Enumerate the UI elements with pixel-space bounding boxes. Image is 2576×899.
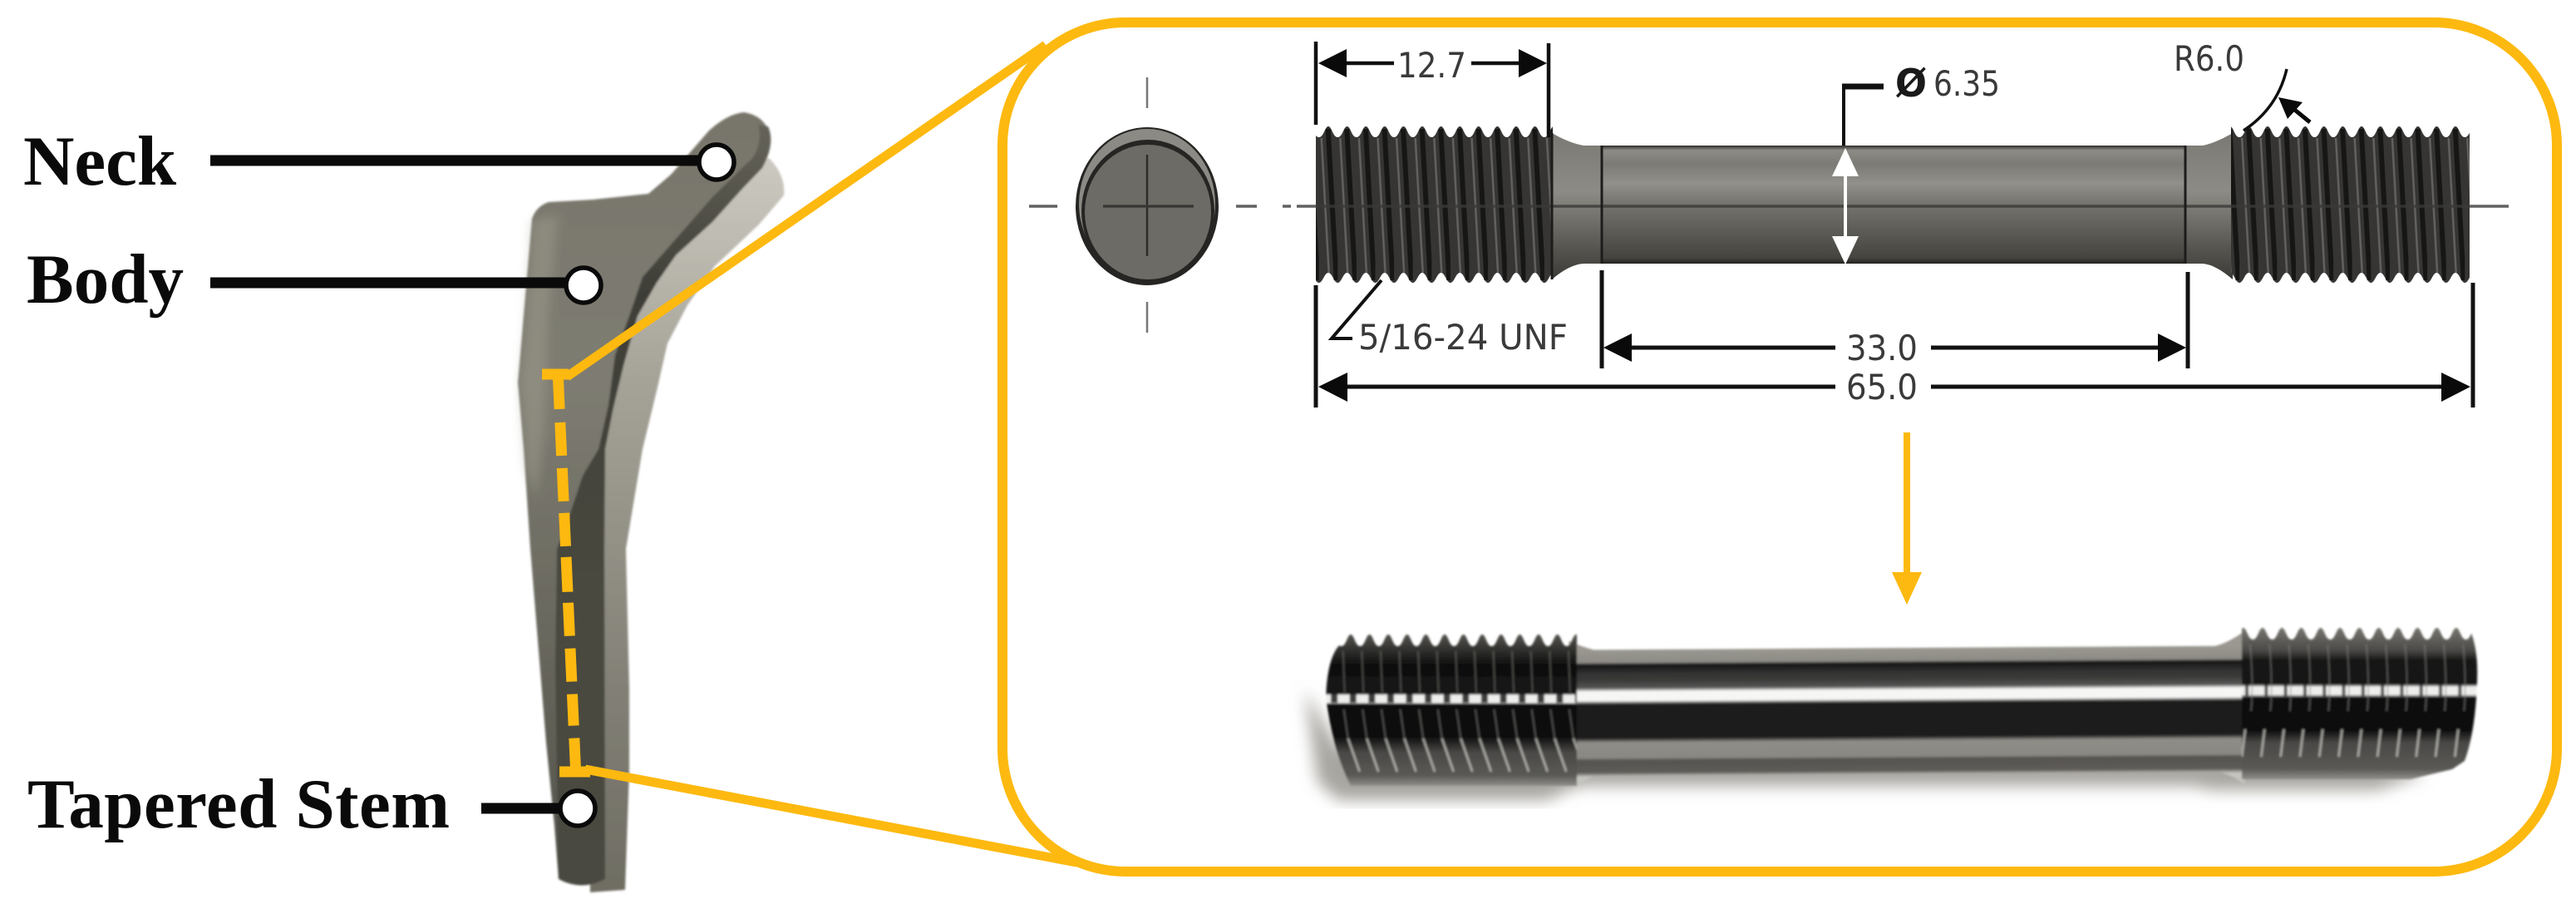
dimension 33.0: 33.0: [1846, 328, 1918, 368]
thread callout 5/16-24 UNF: [1332, 280, 1568, 358]
left threaded grip: [1316, 126, 1553, 283]
implant shadow: [582, 158, 784, 892]
dimension 12.7: [1316, 42, 1549, 137]
diameter callout 6.35: Ø: [1895, 61, 1927, 106]
implant photograph: [518, 112, 784, 892]
gauge section shaft: [1602, 146, 2185, 264]
photo right thread: [2242, 628, 2479, 779]
radius callout R6.0: R6.0: [2174, 38, 2244, 79]
implant dark side face: [555, 125, 771, 885]
upper callout diagonal: [567, 45, 1046, 377]
photo polished shaft: [1569, 631, 2245, 791]
implant left light strip: [520, 215, 559, 499]
label: Neck: [23, 122, 734, 200]
right threaded grip: [2231, 126, 2470, 283]
technical drawing of specimen: [1029, 38, 2509, 408]
dimension 33.0: [1602, 270, 2188, 368]
photo shadow: [1305, 690, 2427, 800]
radius callout R6.0: [2174, 38, 2310, 131]
section lines: [1552, 133, 2185, 279]
centre line: [1029, 205, 2509, 208]
right fillet: [2185, 133, 2233, 279]
lower callout line: [585, 769, 1076, 862]
section end tick: [559, 767, 590, 777]
yellow down arrow: [1892, 432, 1922, 605]
label: Neck: Neck: [23, 122, 177, 200]
label: Body: Body: [27, 240, 184, 319]
white diameter arrow: [1832, 148, 1859, 264]
photo left thread: [1322, 635, 1577, 786]
diameter callout 6.35: [1842, 61, 2000, 146]
dashed section marker: [559, 379, 590, 772]
photo of machined specimen: [1305, 628, 2479, 800]
left fillet: [1552, 133, 1602, 279]
diameter callout 6.35: 6.35: [1933, 63, 2000, 104]
label: Tapered Stem: Tapered Stem: [27, 765, 450, 843]
panel: rounded detail frame: [1002, 22, 2557, 872]
yellow callout lines: [542, 45, 1076, 862]
dashed centre line: [559, 379, 575, 769]
implant metal body: [518, 112, 770, 885]
dimension 65.0: 65.0: [1846, 367, 1918, 408]
dimension 65.0: [1316, 283, 2473, 408]
dimension 12.7: 12.7: [1397, 45, 1466, 86]
end view of specimen: [1076, 77, 1219, 333]
label: Body: [27, 240, 601, 319]
upper callout line: [542, 369, 569, 379]
thread callout 5/16-24 UNF: 5/16-24 UNF: [1358, 317, 1568, 358]
